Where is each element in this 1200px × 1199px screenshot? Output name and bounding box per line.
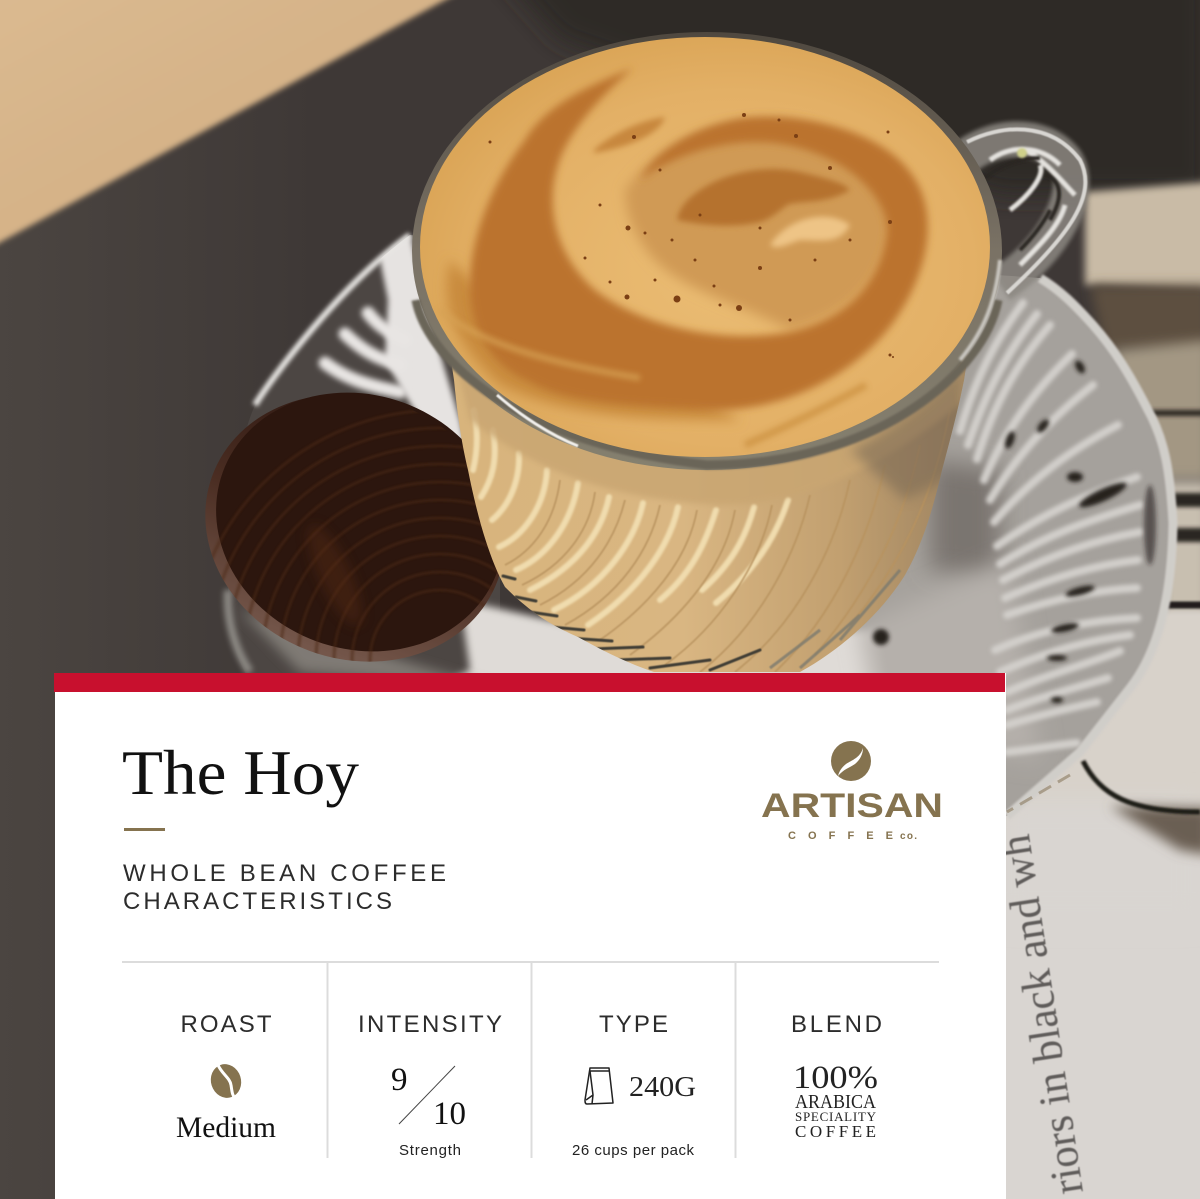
logo wordmark: ARTISAN — [761, 787, 943, 825]
intensity score: 10 — [433, 1096, 466, 1132]
subtitle — [123, 860, 446, 915]
chocolate disc — [206, 392, 499, 662]
white cloth under left of saucer — [377, 235, 462, 440]
rim and foam — [412, 32, 1002, 470]
dark base dashes — [503, 576, 760, 670]
title: The Hoy — [122, 738, 360, 808]
intensity score: 9 — [391, 1062, 408, 1098]
icon: logo bean — [831, 741, 871, 781]
cup rib highlights — [473, 410, 788, 625]
brand logo — [761, 741, 943, 842]
intensity caption: Strength — [399, 1142, 461, 1159]
roast value: Medium — [176, 1111, 276, 1144]
roast heading: ROAST — [180, 1011, 272, 1038]
icon: coffee bean — [206, 1060, 246, 1102]
blend stamp: COFFEE — [795, 1122, 876, 1141]
red top bar — [54, 673, 1005, 692]
subtitle: CHARACTERISTICS — [123, 888, 392, 915]
column: type — [572, 1011, 696, 1159]
tan surface top left — [0, 0, 555, 275]
band under rim — [460, 370, 966, 506]
column: intensity — [358, 1011, 502, 1159]
intensity score — [391, 1062, 466, 1132]
fine ribs — [504, 480, 929, 672]
blend stamp — [793, 1060, 878, 1141]
type heading: TYPE — [599, 1011, 668, 1038]
glass cup handle — [962, 129, 1085, 293]
blend heading: BLEND — [791, 1011, 882, 1038]
card background — [55, 673, 1006, 1199]
type caption: 26 cups per pack — [572, 1142, 694, 1159]
blend stamp: 100% — [793, 1060, 878, 1096]
foam swirl — [440, 68, 928, 445]
saucer rim — [255, 235, 410, 405]
column: blend — [791, 1011, 882, 1141]
printed text on paper: riors in black and wh — [992, 832, 1093, 1198]
logo tagline suffix: co. — [900, 831, 917, 842]
info card — [54, 673, 1006, 1199]
blend stamp: SPECIALITY — [795, 1109, 877, 1124]
glass saucer — [220, 230, 1179, 816]
pack weight: 240G — [629, 1071, 696, 1103]
column: roast — [176, 1011, 276, 1144]
ribs on the right — [960, 303, 1140, 752]
intensity heading: INTENSITY — [358, 1011, 502, 1038]
glass cup with milky coffee — [412, 32, 1002, 672]
logo tagline: COFFEE — [788, 830, 893, 842]
icon: coffee bag — [585, 1068, 613, 1104]
beige box top right — [1085, 182, 1200, 290]
table grid lines — [122, 961, 939, 1158]
title accent rule — [124, 828, 165, 831]
soft underlay near the lower left edge — [447, 260, 740, 420]
subtitle: WHOLE BEAN COFFEE — [123, 860, 446, 887]
dark cables — [1140, 410, 1200, 416]
blend stamp: ARABICA — [795, 1091, 876, 1113]
